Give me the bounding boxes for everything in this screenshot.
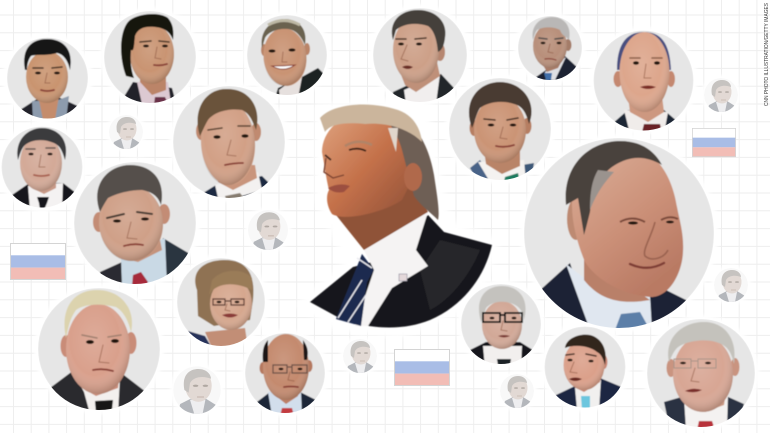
Trump hair — [320, 104, 439, 220]
portrait: man in cyan tie — [544, 326, 626, 412]
Trump face — [322, 116, 412, 217]
Trump neck — [332, 170, 428, 250]
Russian flag: bottom center — [394, 350, 450, 386]
small faded Putin: bottom center — [343, 339, 377, 373]
Trump shirt — [355, 212, 428, 326]
Russian flag: right — [692, 128, 736, 157]
Trump tie — [336, 254, 374, 326]
portrait: Jeff Sessions — [647, 319, 755, 430]
portrait: Felix Sater — [247, 15, 327, 98]
portrait: Emin Agalarov — [7, 38, 88, 120]
portrait: Donald Trump Jr. — [104, 11, 196, 110]
portrait: Betsy DeVos — [177, 258, 265, 348]
Putin hair — [566, 141, 662, 235]
Putin shirt and tie — [566, 264, 652, 330]
portrait: Roger Stone — [38, 288, 160, 414]
portrait: Aras Agalarov — [2, 126, 82, 210]
small faded Putin: bottom left — [173, 366, 221, 414]
Putin face — [584, 255, 650, 302]
portrait: Donald Trump (center) — [310, 104, 492, 328]
Trump eyes, nose, mouth — [324, 142, 372, 192]
portrait: Vladimir Putin — [524, 138, 714, 330]
Trump ear — [404, 163, 422, 191]
Putin suit — [542, 262, 686, 323]
portrait: Paul Manafort — [449, 78, 551, 182]
portrait: Carter Page — [594, 30, 694, 134]
portrait: Michael Cohen — [373, 8, 467, 104]
small faded Putin: right upper — [704, 78, 738, 112]
portrait: Wilbur Ross — [245, 333, 325, 416]
Putin eyes, nose, mouth — [620, 218, 645, 222]
portrait: Michael Flynn — [74, 162, 196, 286]
small faded Putin: bottom right — [500, 374, 534, 408]
Russian flag: left — [10, 244, 66, 280]
small faded Putin: center left — [248, 210, 288, 250]
Trump suit — [310, 215, 492, 328]
portrait: Rex Tillerson — [518, 16, 582, 82]
small faded Putin: right lower — [714, 268, 748, 302]
portrait: Vitaly Churkin — [461, 284, 541, 368]
caption: photo credit: CNN PHOTO ILLUSTRATION/GETTY IMAGES — [764, 2, 770, 106]
white halo behind Trump — [295, 95, 500, 338]
portrait: Jared Kushner — [173, 86, 285, 200]
Trump flag pin — [399, 274, 407, 281]
small faded Putin: upper left — [109, 115, 143, 149]
